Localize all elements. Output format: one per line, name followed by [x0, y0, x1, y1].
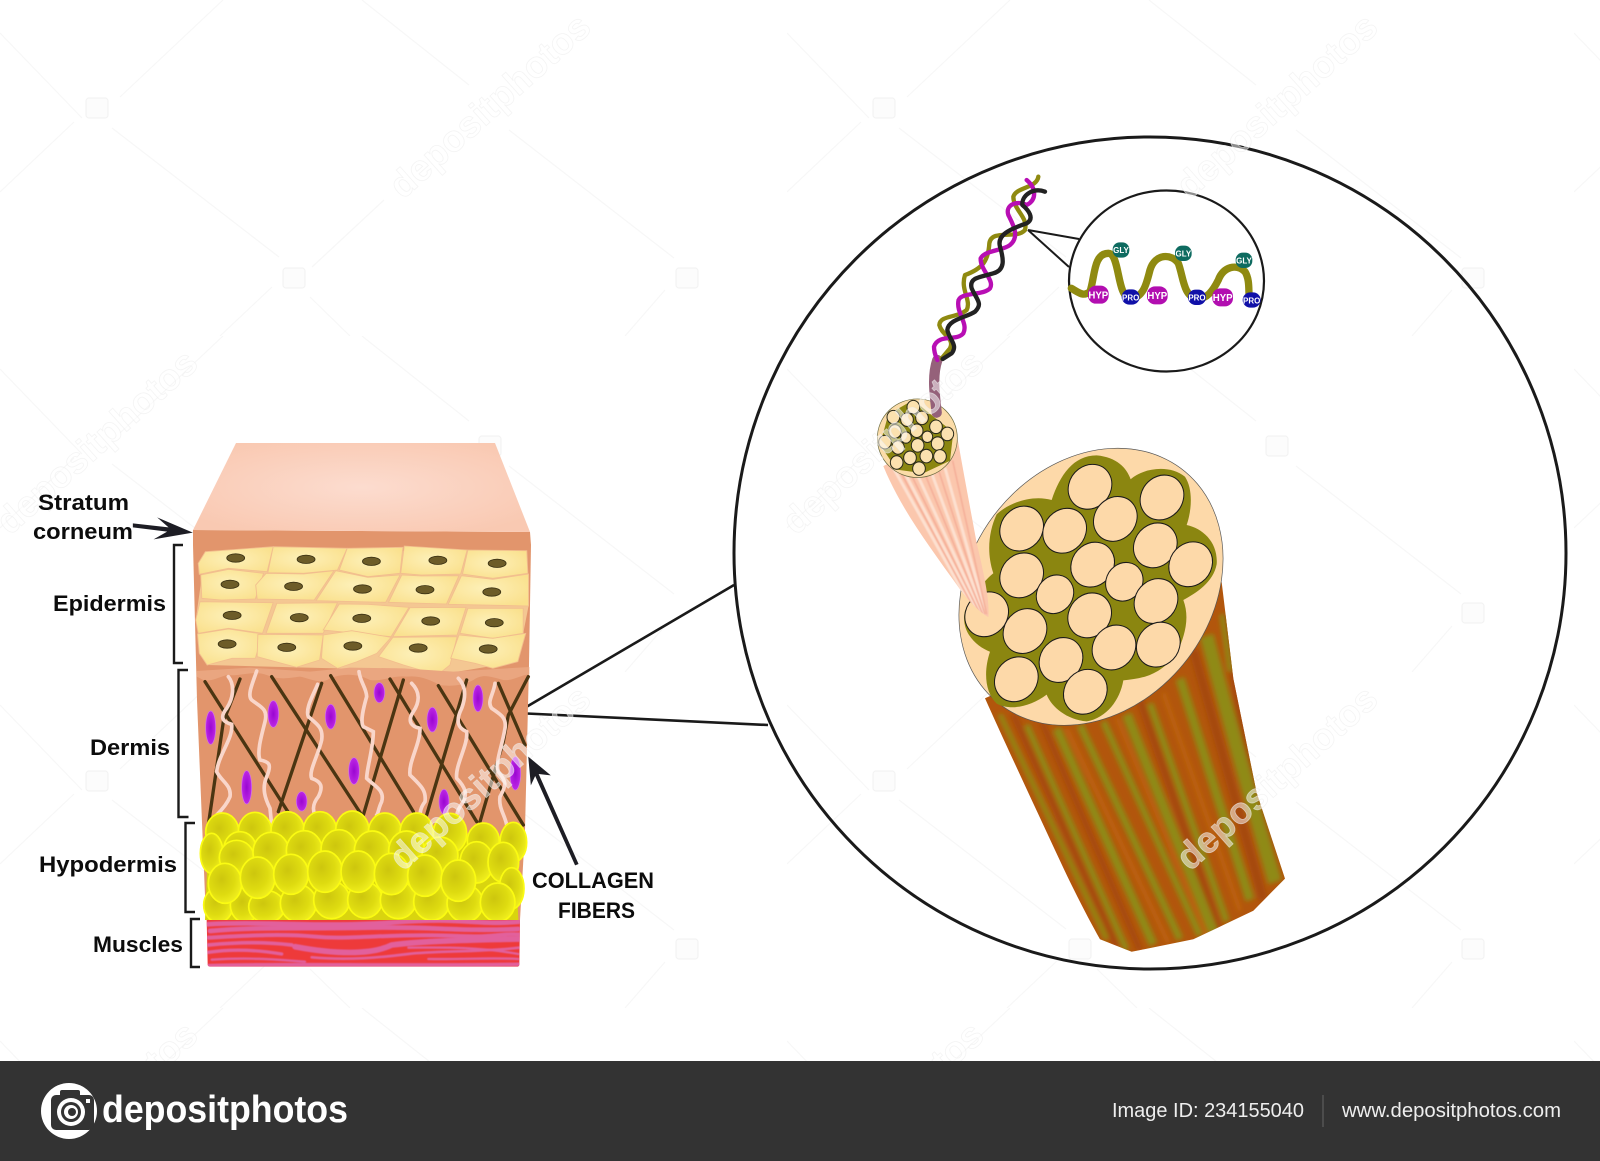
large magnifier circle	[734, 137, 1566, 969]
watermark text: depositphotos	[1168, 6, 1385, 206]
cell nuclei	[218, 554, 506, 653]
skin body	[193, 530, 531, 920]
watermark camera icons	[86, 98, 1484, 959]
arrow: collagen fibers	[528, 757, 579, 865]
olive matrix	[964, 455, 1217, 721]
magenta strand	[934, 180, 1034, 360]
inset circle: amino acid chain	[1069, 190, 1264, 372]
skin cross-section	[193, 443, 531, 967]
label: Muscles: Muscles	[93, 932, 183, 957]
residues: HYP	[1088, 290, 1109, 301]
footer url: www.depositphotos.com	[1341, 1100, 1561, 1122]
residues: GLY	[1113, 246, 1130, 255]
residues: GLY	[1175, 249, 1192, 258]
watermark text: depositphotos	[774, 342, 991, 542]
fibril cone	[883, 437, 989, 617]
epidermis cells	[196, 546, 529, 675]
collagen fiber bundle	[877, 391, 1285, 952]
label: Epidermis: Epidermis	[53, 591, 166, 616]
fibril cross-section	[877, 399, 957, 477]
inset pointer lines	[1028, 230, 1079, 267]
footer bar	[0, 1061, 1600, 1161]
label: Collagen fibers: FIBERS	[558, 898, 635, 923]
magnifier pointer lines	[516, 585, 768, 725]
collagen fibers dark strands	[205, 676, 528, 825]
bundle body	[985, 582, 1285, 952]
muscle layer	[207, 920, 520, 967]
label: Hypodermis: Hypodermis	[39, 852, 177, 877]
black strand	[943, 190, 1045, 359]
icon: camera logo	[41, 1083, 97, 1139]
watermark text: depositphotos	[381, 678, 598, 878]
dermis upper band	[197, 667, 529, 686]
watermark text: depositphotos	[1168, 678, 1385, 878]
watermark text: depositphotos	[381, 6, 598, 206]
residues: GLY	[1236, 256, 1253, 265]
dermis layer	[197, 667, 529, 825]
strand stem	[934, 360, 937, 413]
hypodermis fat cells	[200, 811, 527, 923]
polypeptide chain	[1071, 253, 1249, 299]
label: Stratum corneum: Stratum	[38, 490, 129, 515]
arrow: stratum corneum	[133, 517, 193, 539]
label: Stratum corneum	[33, 490, 133, 544]
bundle cross-section face	[906, 391, 1276, 782]
olive strand	[939, 177, 1038, 358]
residues	[1088, 242, 1261, 308]
label: Stratum corneum: corneum	[33, 519, 133, 544]
label: Dermis: Dermis	[90, 735, 170, 760]
brackets	[174, 545, 200, 967]
footer logo text: depositphotos	[102, 1089, 348, 1131]
residues: PRO	[1122, 293, 1139, 302]
residues: PRO	[1243, 296, 1260, 305]
residues: HYP	[1147, 291, 1168, 302]
footer image id: Image ID: 234155040	[1112, 1100, 1304, 1122]
residues: PRO	[1188, 294, 1206, 303]
purple fibroblasts	[206, 683, 521, 814]
elastin wavy strands	[217, 671, 507, 825]
label: Collagen fibers	[532, 868, 654, 923]
residues: HYP	[1213, 293, 1233, 304]
fibril ends	[957, 455, 1221, 723]
skin top surface	[193, 443, 530, 532]
triple helix strand	[934, 177, 1045, 413]
label: Collagen fibers: COLLAGEN	[532, 868, 654, 893]
